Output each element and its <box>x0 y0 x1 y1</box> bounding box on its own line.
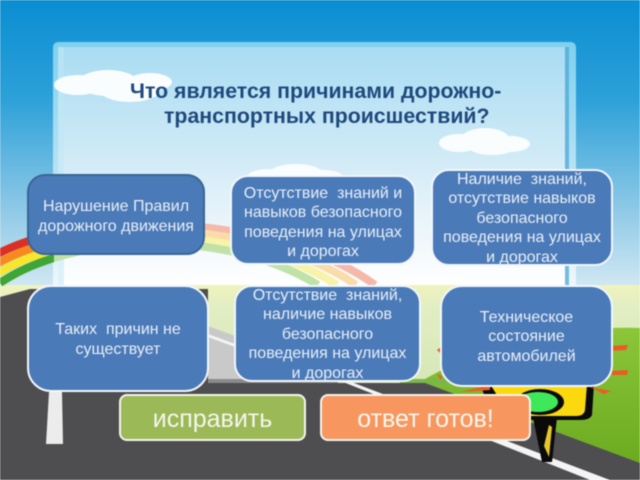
answer box: skills without knowledge: наличие навыков <box>263 306 392 323</box>
answer box: skills without knowledge <box>234 285 421 382</box>
answer box: knowledge without skills: отсутствие навыков <box>448 190 596 207</box>
cloud: top right <box>439 128 530 155</box>
button: correct <box>119 394 306 441</box>
answer box: road rules violation: дорожного движения <box>38 218 194 234</box>
title: Что является причинами дорожно- <box>130 79 501 103</box>
answer box: no knowledge and no skills: Отсутствие знаний и <box>244 185 402 202</box>
road line: left <box>46 392 63 444</box>
answer box: knowledge without skills: безопасного <box>476 210 568 227</box>
road line: right <box>338 380 610 480</box>
traffic light <box>437 345 628 462</box>
button: correct: исправить <box>153 404 272 432</box>
answer box: skills without knowledge: Отсутствие знаний, <box>253 287 402 304</box>
road line: centre <box>208 334 235 347</box>
answer box: no knowledge and no skills <box>230 175 416 265</box>
answer box: vehicle condition: Техническое <box>480 309 573 326</box>
answer box: road rules violation <box>27 174 205 255</box>
cloud: top left <box>54 70 172 102</box>
title: транспортных происшествий? <box>164 104 490 128</box>
button: answer ready <box>320 394 531 441</box>
answer box: skills without knowledge: безопасного <box>282 326 373 343</box>
answer box: skills without knowledge: и дорогах <box>292 365 363 382</box>
answer box: no knowledge and no skills: поведения на улицах <box>244 224 402 240</box>
title <box>130 79 502 128</box>
answer box: skills without knowledge: поведения на улицах <box>249 345 406 362</box>
answer box: no knowledge and no skills: навыков безопасного <box>244 204 402 221</box>
cloud: middle <box>248 164 342 183</box>
green fields <box>0 285 640 470</box>
answer box: knowledge without skills: Наличие знаний, <box>457 171 587 188</box>
rainbow <box>0 224 375 285</box>
answer box: knowledge without skills <box>431 169 613 266</box>
answer box: no such causes <box>27 285 209 392</box>
answer box: road rules violation: Нарушение Правил <box>43 198 189 215</box>
road <box>0 289 640 480</box>
answer box: knowledge without skills: поведения на улицах <box>443 229 601 246</box>
answer box: vehicle condition: автомобилей <box>477 348 576 365</box>
answer box: vehicle condition: состояние <box>488 328 565 345</box>
answer box: vehicle condition <box>440 285 613 387</box>
answer box: no knowledge and no skills: и дорогах <box>287 243 359 260</box>
button: answer ready: ответ готов! <box>357 404 494 432</box>
panel frame <box>53 42 576 285</box>
answer box: no such causes: существует <box>76 340 160 358</box>
answer box: no such causes: Таких причин не <box>55 321 181 338</box>
answer box: knowledge without skills: и дорогах <box>486 249 558 266</box>
sky <box>0 0 640 300</box>
